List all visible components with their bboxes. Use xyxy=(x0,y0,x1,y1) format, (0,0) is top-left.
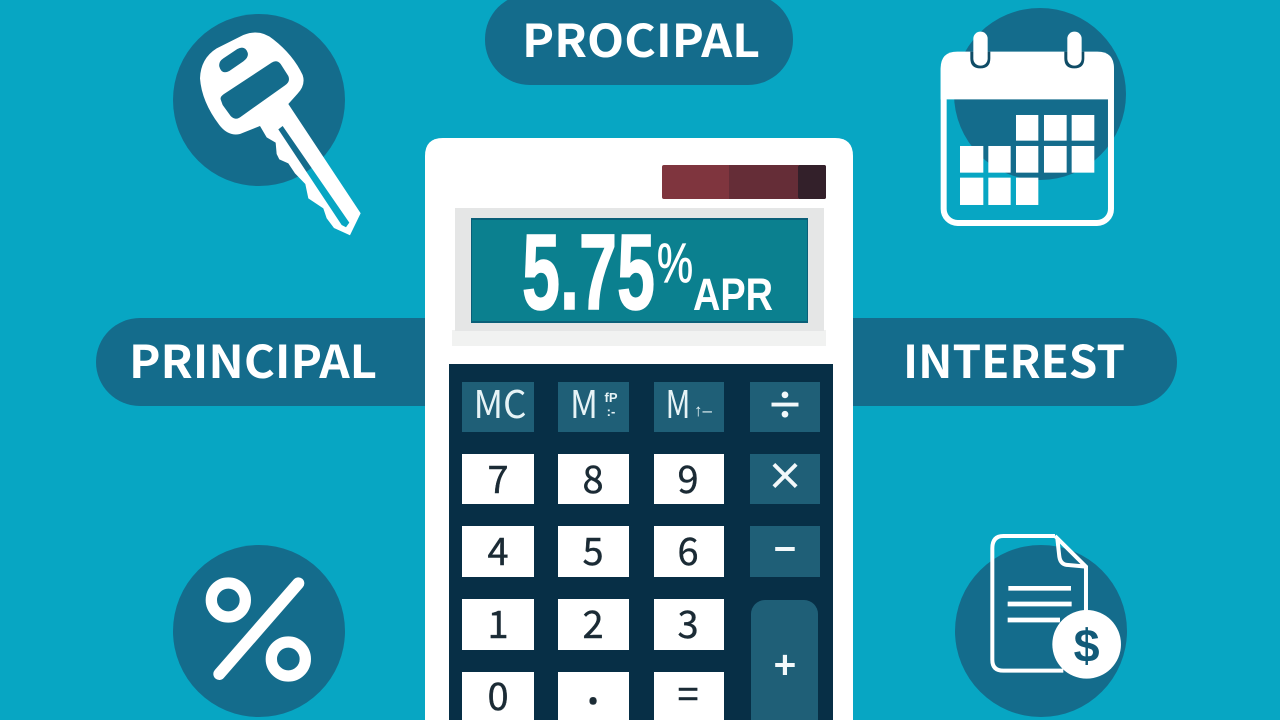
key labels: − xyxy=(774,519,796,574)
solar panel xyxy=(662,165,826,199)
key labels: 1 xyxy=(487,594,509,649)
key labels: M xyxy=(570,374,598,429)
key labels: 8 xyxy=(582,449,604,504)
key labels: 7 xyxy=(487,449,509,504)
key labels: ↑– xyxy=(694,401,713,420)
icon: percent on circle xyxy=(173,545,345,717)
display readout: % xyxy=(657,231,693,294)
key labels: 3 xyxy=(677,594,699,649)
key labels: 0 xyxy=(487,666,509,720)
display readout: APR xyxy=(693,269,773,320)
key labels xyxy=(474,374,804,720)
key labels: 5 xyxy=(582,521,604,576)
pill: INTEREST: INTEREST xyxy=(903,326,1125,391)
pill: PROCIPAL: PROCIPAL xyxy=(522,5,760,70)
pill: PRINCIPAL: PRINCIPAL xyxy=(129,326,377,391)
key labels: 6 xyxy=(677,521,699,576)
key labels: 2 xyxy=(582,594,604,649)
key labels: . xyxy=(587,660,599,715)
icon: calendar on circle xyxy=(941,8,1126,223)
key labels: M xyxy=(666,374,690,429)
calculator xyxy=(425,138,853,720)
key labels: = xyxy=(677,664,699,719)
display readout: 5.75 xyxy=(522,211,655,332)
number keys xyxy=(462,454,724,720)
calculator body xyxy=(425,138,853,720)
keypad xyxy=(449,364,833,720)
key labels: fP xyxy=(604,390,618,405)
key labels: + xyxy=(774,635,796,690)
pill: INTEREST xyxy=(740,318,1177,406)
icon: document with dollar on circle xyxy=(955,536,1127,717)
key labels: ÷ xyxy=(766,375,804,430)
pill: PROCIPAL xyxy=(485,0,793,85)
display bezel xyxy=(452,208,826,346)
key labels: × xyxy=(766,446,804,501)
key labels: 9 xyxy=(677,449,699,504)
display readout xyxy=(471,211,808,332)
icon: document with dollar on circle: $ xyxy=(1074,619,1100,671)
key labels: 4 xyxy=(487,521,509,576)
memory and operator keys xyxy=(462,382,820,720)
key labels: MC xyxy=(474,374,526,429)
key labels: :- xyxy=(607,404,615,419)
pill: PRINCIPAL xyxy=(96,318,536,406)
icon: car key on circle xyxy=(173,14,361,235)
